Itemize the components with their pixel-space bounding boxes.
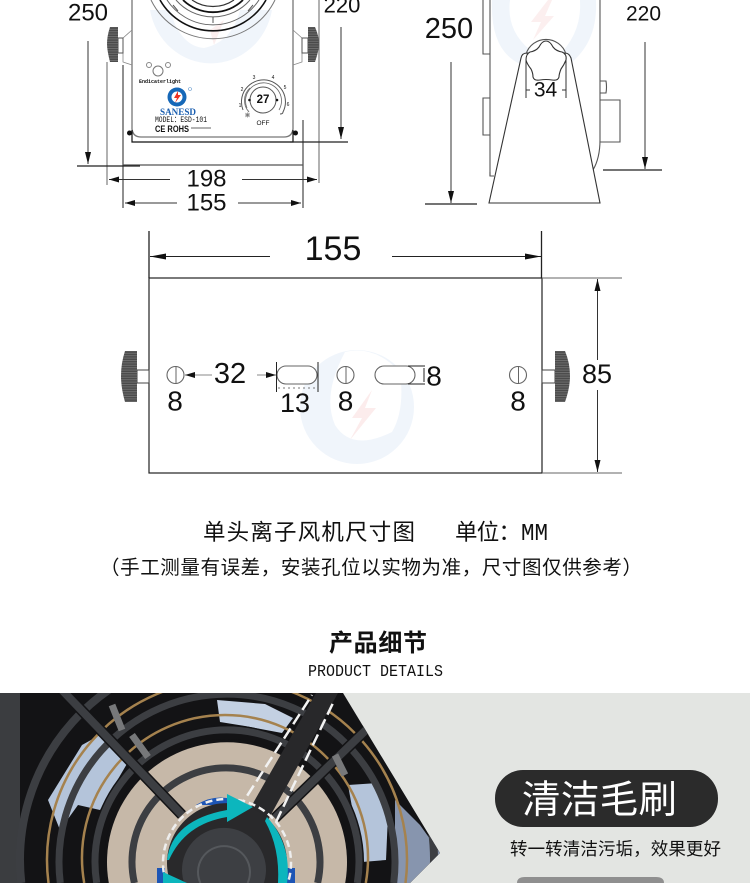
subheading: product details English: PRODUCT DETAILS xyxy=(308,663,443,682)
dimension 220 side: 220 xyxy=(626,2,661,26)
mounting hole right xyxy=(510,366,526,416)
base and extension lines xyxy=(77,0,348,208)
panel: side view drawing xyxy=(425,0,662,204)
speed dial: 2 xyxy=(241,87,244,93)
mounting hole left: 8 xyxy=(167,386,183,416)
caption: drawing title and unit: 单头离子风机尺寸图 xyxy=(203,520,415,545)
speed dial: 1 xyxy=(239,103,242,109)
panel: detail background xyxy=(0,693,750,883)
mounting hole centre: 8 xyxy=(338,386,353,416)
speed dial: 3 xyxy=(253,75,256,81)
central hub xyxy=(163,799,291,883)
heading: product details: 产品细节 xyxy=(329,630,427,657)
watermark: side view logo xyxy=(492,0,596,64)
certification text: CE ROHS xyxy=(155,124,189,134)
panel: top view drawing xyxy=(121,230,622,473)
description: cleaning brush: 转一转清洁污垢，效果更好 xyxy=(510,839,721,859)
dimension 250: 250 xyxy=(68,0,108,26)
dimension 155 top: 155 xyxy=(305,230,361,268)
fan guard rings xyxy=(151,0,275,39)
top view outline xyxy=(149,231,622,473)
side view housing xyxy=(483,0,620,176)
label pill: cleaning brush: 清洁毛刷 xyxy=(522,779,677,822)
slot with dimension 13: 13 xyxy=(280,388,310,418)
dimension 250 side: 250 xyxy=(425,13,473,45)
cleaning brush strap xyxy=(238,693,338,822)
photo: fan with cleaning brush xyxy=(0,693,440,883)
mounting hole centre xyxy=(337,366,354,416)
speed dial: 27 xyxy=(257,94,269,106)
speed dial xyxy=(239,75,290,127)
brand logo SANESD xyxy=(160,88,197,117)
dimension 85: 85 xyxy=(582,359,612,389)
dimension 155: 155 xyxy=(186,190,227,216)
speed dial: OFF xyxy=(256,120,270,127)
caption: measurement note: （手工测量有误差，安装孔位以实物为准，尺寸图仅供参考） xyxy=(100,557,642,579)
speed dial: 5 xyxy=(284,85,287,91)
left knob top view xyxy=(121,351,149,402)
housing outline xyxy=(123,0,302,142)
caption: drawing title and unit: 单位： xyxy=(455,520,521,545)
indicator light: Endicaterlight xyxy=(139,79,181,85)
cyan rotation arrows xyxy=(163,794,288,883)
slot with dimension 8 xyxy=(375,360,442,392)
brand logo SANESD: SANESD xyxy=(160,107,197,117)
gold rings xyxy=(47,680,407,883)
grey guard rings and ribs xyxy=(20,693,438,883)
model text: MODEL：ESD-101 xyxy=(155,116,207,125)
side view stand xyxy=(489,53,600,203)
dimension 32 xyxy=(185,358,276,390)
mounting hole right: 8 xyxy=(510,386,526,416)
dimension 34: 34 xyxy=(534,78,557,102)
speed dial: 4 xyxy=(272,75,275,81)
right knob top view xyxy=(542,351,570,402)
caption: drawing title and unit: MM xyxy=(521,521,548,548)
indicator light xyxy=(139,62,181,85)
watermark: front view logo xyxy=(150,10,272,63)
dimension 34 xyxy=(526,60,566,102)
label pill: cleaning brush xyxy=(495,770,718,827)
left knob xyxy=(107,27,123,62)
beige impeller disc xyxy=(97,732,357,883)
slot with dimension 8: 8 xyxy=(426,360,442,392)
panel: front view drawing xyxy=(68,0,360,216)
next label pill xyxy=(517,877,664,883)
slot with dimension 13 xyxy=(276,362,318,418)
right knob xyxy=(302,27,319,62)
dimension 32: 32 xyxy=(214,358,246,390)
white filter segments xyxy=(48,700,440,883)
watermark: top view logo xyxy=(300,350,414,464)
caption: drawing title and unit xyxy=(203,520,548,548)
star knob xyxy=(526,39,566,80)
dimension 198: 198 xyxy=(186,166,227,192)
speed dial: 6 xyxy=(287,102,290,108)
mounting hole left xyxy=(167,366,184,416)
